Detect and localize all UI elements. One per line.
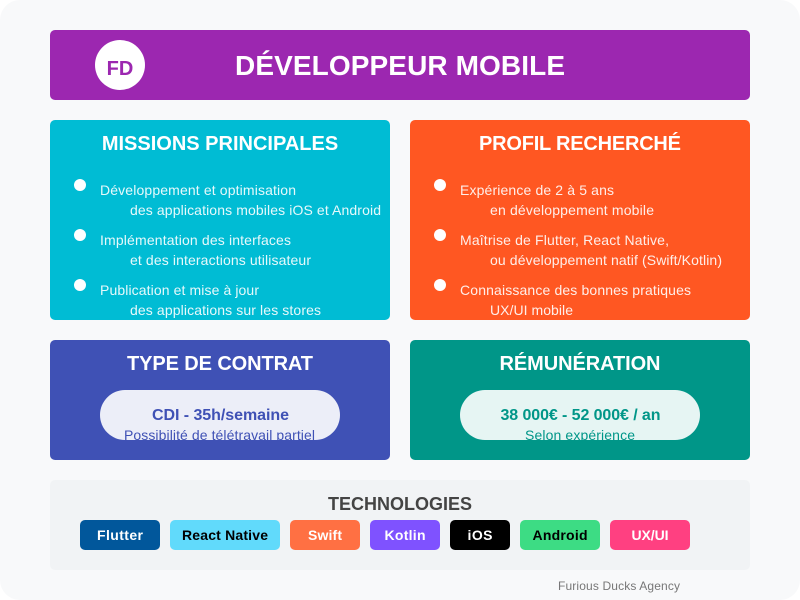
- heading: contrat: TYPE DE CONTRAT: [127, 353, 313, 375]
- panel: rémunération: [410, 340, 750, 460]
- tag: Swift: [290, 520, 360, 550]
- tag: Android: Android: [532, 527, 588, 543]
- profile item 1: en développement mobile: [490, 202, 654, 218]
- pill: salary details: 38 000€ - 52 000€ / an: [500, 407, 660, 424]
- mission item 3: des applications sur les stores: [130, 302, 321, 318]
- mission item 1: des applications mobiles iOS et Android: [130, 202, 381, 218]
- panel: type de contrat: [50, 340, 390, 460]
- logo: FD badge: FD: [107, 58, 133, 80]
- tag: Android: [520, 520, 600, 550]
- mission item 2: Implémentation des interfaces: [100, 232, 291, 248]
- tag: Swift: Swift: [308, 527, 342, 543]
- pill: contract details: CDI - 35h/semaine: [152, 407, 289, 424]
- tag: Kotlin: [370, 520, 440, 550]
- profile item 2: ou développement natif (Swift/Kotlin): [490, 252, 722, 268]
- heading: missions: MISSIONS PRINCIPALES: [102, 133, 338, 155]
- heading: technologies: TECHNOLOGIES: [328, 494, 472, 514]
- heading: rémunération: RÉMUNÉRATION: [500, 352, 660, 375]
- pill: salary details: Selon expérience: [525, 427, 635, 443]
- header banner: [50, 30, 750, 100]
- profile item 3: UX/UI mobile: [490, 302, 573, 318]
- panel: profil recherché: [410, 120, 750, 320]
- mission item 1: [74, 179, 381, 218]
- tag: iOS: iOS: [468, 527, 492, 543]
- footer credit: Furious Ducks Agency: [558, 579, 680, 593]
- tag: React Native: [170, 520, 280, 550]
- tag: Flutter: [80, 520, 160, 550]
- mission item 2: [74, 229, 311, 268]
- profile item 3: Connaissance des bonnes pratiques: [460, 282, 691, 298]
- mission item 2: et des interactions utilisateur: [130, 252, 311, 268]
- logo: FD badge: [95, 40, 145, 90]
- tag: React Native: React Native: [182, 527, 268, 543]
- tag: Flutter: Flutter: [97, 527, 144, 543]
- profile item 1: [434, 179, 654, 218]
- profile item 2: [434, 229, 722, 268]
- pill: contract details: Possibilité de télétravail partiel: [124, 427, 315, 443]
- profile item 1: Expérience de 2 à 5 ans: [460, 182, 614, 198]
- pill: contract details: [100, 390, 340, 443]
- tag: UX/UI: [610, 520, 690, 550]
- title: DÉVELOPPEUR MOBILE: [235, 50, 565, 81]
- mission item 3: Publication et mise à jour: [100, 282, 259, 298]
- tag: Kotlin: Kotlin: [384, 527, 426, 543]
- tag: UX/UI: UX/UI: [632, 527, 668, 543]
- panel: missions principales: [50, 120, 390, 320]
- pill: salary details: [460, 390, 700, 443]
- mission item 3: [74, 279, 321, 318]
- mission item 1: Développement et optimisation: [100, 182, 296, 198]
- tag: iOS: [450, 520, 510, 550]
- heading: profil: PROFIL RECHERCHÉ: [479, 132, 681, 155]
- profile item 3: [434, 279, 691, 318]
- profile item 2: Maîtrise de Flutter, React Native,: [460, 232, 669, 248]
- panel: technologies: [50, 480, 750, 570]
